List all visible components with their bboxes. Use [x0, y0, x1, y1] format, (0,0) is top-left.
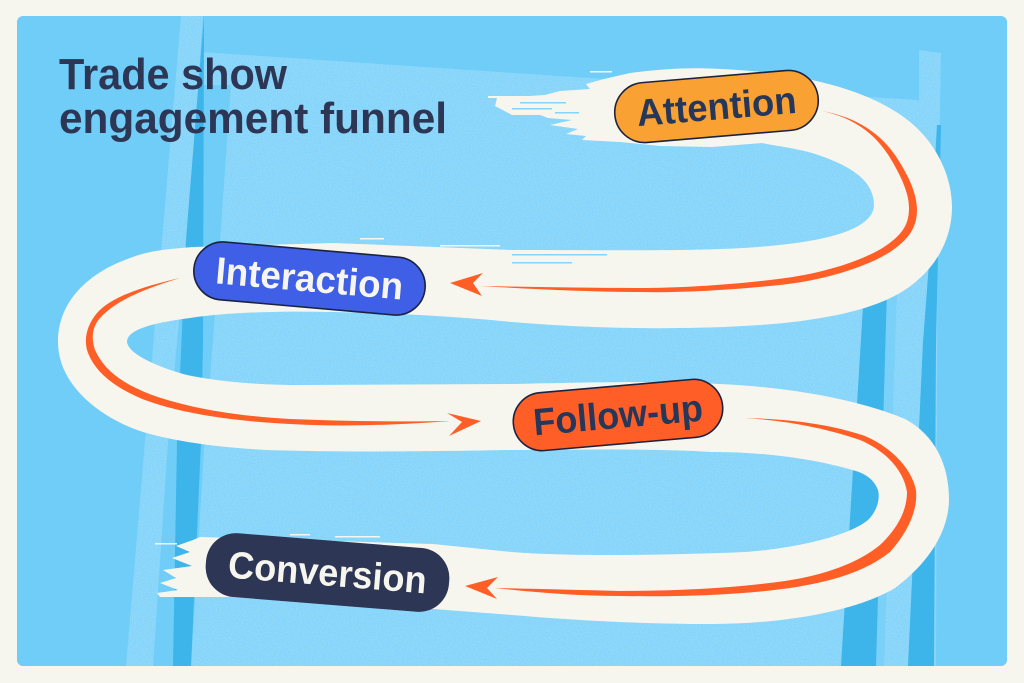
backdrop: left light post	[126, 16, 203, 666]
title: Trade show	[59, 50, 288, 99]
backdrop: right dark post inner	[841, 290, 887, 666]
arrow: attention to interaction	[450, 111, 917, 296]
backdrop: paper grain	[126, 16, 941, 666]
step: Conversion	[203, 531, 452, 614]
title	[59, 50, 447, 143]
step: Interaction: Interaction	[214, 250, 405, 309]
step: Follow-up: Follow-up	[532, 388, 705, 444]
ribbon: blue nicks	[512, 102, 607, 264]
backdrop: right light post	[919, 50, 941, 125]
arrowhead: conversion	[465, 577, 498, 599]
backdrop: right medium post	[876, 290, 897, 666]
backdrop: light wall	[191, 52, 938, 666]
backdrop: right dark post outer	[908, 125, 941, 666]
arrowhead: follow-up	[447, 413, 481, 436]
title: engagement funnel	[59, 94, 447, 143]
arrow: follow-up to conversion	[465, 418, 916, 599]
step: Conversion: Conversion	[227, 545, 428, 602]
ribbon: dry brush streaks	[155, 71, 612, 544]
backdrop: left dark post	[173, 16, 204, 666]
ribbon: winding brush stroke	[58, 68, 952, 624]
arrow: interaction to follow-up	[86, 278, 481, 436]
step: Attention	[612, 68, 821, 145]
arrowhead: interaction	[450, 273, 483, 296]
step: Interaction	[191, 240, 428, 317]
step: Follow-up	[511, 377, 725, 453]
step: Attention: Attention	[635, 80, 798, 135]
